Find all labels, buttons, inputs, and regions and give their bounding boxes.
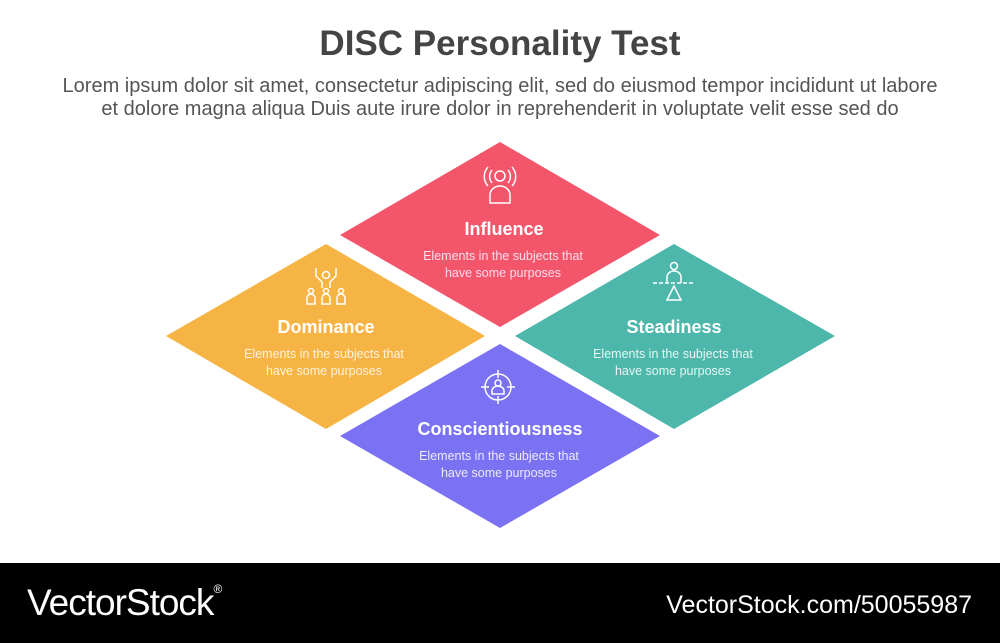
icon: influence [484, 167, 516, 203]
panel: influence: Influence [464, 219, 544, 239]
icon: dominance [307, 268, 345, 304]
icon: conscientiousness [481, 370, 515, 404]
panel: influence: Elements in the subjects that [423, 249, 583, 263]
subtitle text: et dolore magna aliqua Duis aute irure dolor in reprehenderit in voluptate velit esse sed do [101, 98, 899, 120]
title: DISC Personality Test [319, 24, 681, 63]
subtitle text: Lorem ipsum dolor sit amet, consectetur adipiscing elit, sed do eiusmod tempor incididunt ut labore [63, 75, 937, 97]
panel: dominance: Elements in the subjects that [244, 347, 404, 361]
icon: steadiness [653, 262, 695, 300]
panel: steadiness: Elements in the subjects that [593, 347, 753, 361]
subtitle text [63, 75, 937, 120]
footer bar [0, 563, 1000, 643]
panel: steadiness: Steadiness [626, 317, 722, 337]
panel: conscientiousness: Elements in the subjects that [419, 449, 579, 463]
panel: dominance: Dominance [277, 317, 375, 337]
footer brand: VectorStock® [27, 582, 221, 623]
panel: conscientiousness [340, 344, 660, 528]
panel: conscientiousness: have some purposes [441, 466, 557, 480]
panel: conscientiousness: Conscientiousness [417, 419, 583, 439]
panel: steadiness [515, 244, 835, 429]
panel: influence: have some purposes [445, 266, 561, 280]
panel: dominance [166, 244, 485, 429]
footer url: VectorStock.com/50055987 [666, 591, 972, 619]
panel: dominance: have some purposes [266, 364, 382, 378]
panel: influence [340, 142, 660, 327]
panel: steadiness: have some purposes [615, 364, 731, 378]
